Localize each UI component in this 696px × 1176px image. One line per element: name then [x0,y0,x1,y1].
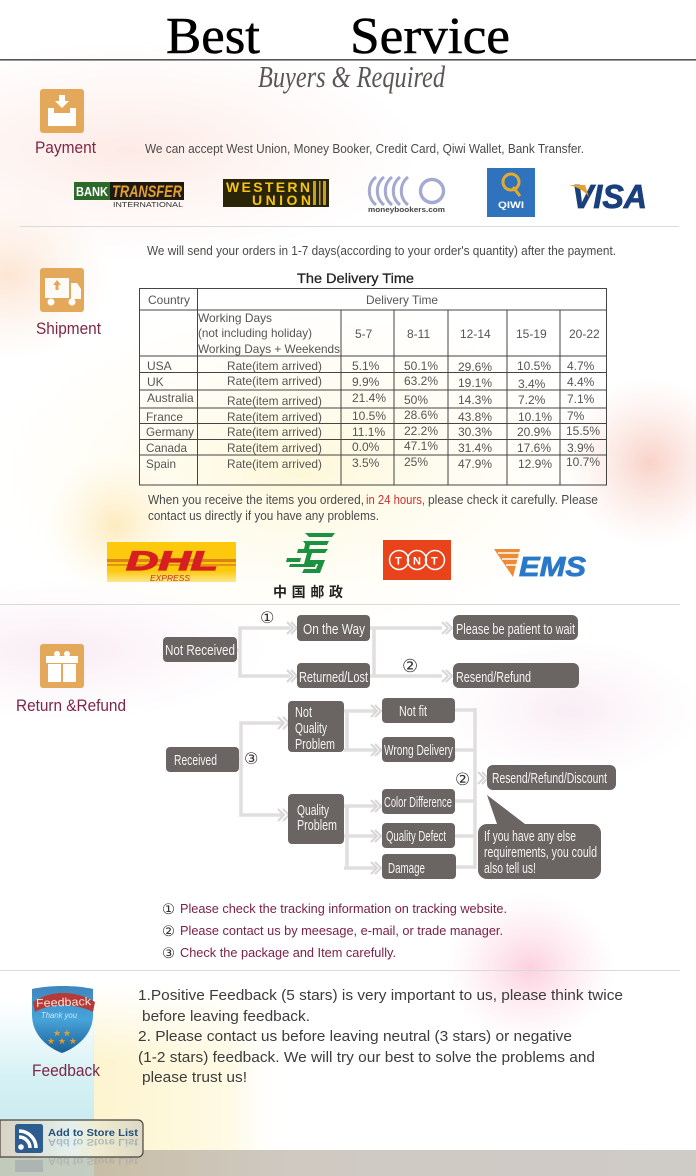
node: not quality problem: Not [295,704,313,721]
title [166,8,510,65]
node: damage [382,854,456,879]
logo: tnt [383,540,451,580]
receipt note: please check it carefully. Please [428,493,598,507]
table rows: 15.5% [566,424,600,438]
node: not quality problem [288,701,344,753]
logo: western union: UNION [252,192,311,208]
heading: payment: Payment [35,138,96,157]
table rows: 0.0% [352,440,380,454]
table rows: Rate(item arrived) [227,374,322,388]
node: quality problem [288,794,344,844]
marker 2: ② [402,656,418,677]
logo: bank transfer: INTERNATIONAL [113,202,183,209]
icon: rss [15,1124,43,1153]
heading: shipment: Shipment [36,319,101,338]
flowchart: not received [163,608,579,688]
table header text: 12-14 [460,327,491,341]
table header text: 8-11 [407,327,430,341]
feedback text [138,987,623,1086]
table rows: 10.5% [352,409,386,423]
table rows: 7.1% [567,392,595,406]
icon: payment [40,89,84,133]
table header text: Delivery Time [366,293,438,307]
table rows: 4.7% [567,359,595,373]
table grid [140,288,606,485]
node: not quality problem: Quality [295,720,327,737]
table rows: 3.5% [352,456,380,470]
table rows: Rate(item arrived) [227,425,322,439]
table rows: 14.3% [458,393,492,407]
legend notes: Please check the tracking information on tracking website. [180,901,507,916]
table rows: 10.1% [518,410,552,424]
divider [20,226,679,227]
callout: requirements, you could [484,844,597,861]
table rows: Rate(item arrived) [227,441,322,455]
legend notes [162,901,507,962]
icon: feedback shield: Feedback [36,996,91,1010]
node: resend/refund: Resend/Refund [456,669,531,686]
receipt note: When you receive the items you ordered, [148,493,364,507]
node: received: Received [174,752,217,769]
table rows: Australia [147,391,194,405]
table header text: 15-19 [516,327,547,341]
logo: ems: EMS [519,551,586,582]
table header text: Working Days + Weekends [198,342,340,356]
table header text: (not including holiday) [198,326,312,340]
table rows: 17.6% [517,441,551,455]
legend notes: ③ [162,946,175,962]
table rows: 19.1% [458,376,492,390]
table rows [146,359,600,471]
table rows: 3.9% [567,441,595,455]
node: not received [163,637,237,662]
table rows: 5.1% [352,359,380,373]
connectors [239,705,488,874]
logo: qiwi: QIWI [498,200,524,211]
table rows: USA [147,359,172,373]
panel: return and refund [16,608,616,962]
icon: feedback shield: ★★ [53,1029,71,1039]
logo: china post: 中国邮政 [273,582,343,602]
table rows: 21.4% [352,391,386,405]
legend notes: ② [162,924,175,940]
node: returned/lost: Returned/Lost [299,669,369,686]
node: resend/refund [453,663,579,688]
table rows: Germany [146,425,194,439]
bottom grey bar [0,1150,696,1176]
node: please be patient: Please be patient to wait [456,621,576,638]
node: wrong delivery [382,737,455,762]
node: not quality problem: Problem [295,736,335,753]
logo: tnt: T [431,556,438,568]
logo: china post [273,533,343,602]
title: Best [166,8,261,65]
shipment intro text: We will send your orders in 1-7 days(according to your order's quantity) after the payment. [147,244,616,258]
table rows: 50% [404,393,428,407]
node: resend/refund/discount [487,765,616,790]
heading: return and refund: Return &Refund [16,696,126,715]
node: resend/refund/discount: Resend/Refund/Discount [492,770,608,787]
legend notes: Check the package and Item carefully. [180,945,396,960]
table rows: 3.4% [518,377,546,391]
logo: dhl: DHL [126,546,218,576]
logo: qiwi [487,168,535,217]
logo: ems [494,549,586,582]
table rows: 9.9% [352,375,380,389]
logo: bank transfer: TRANSFER [112,182,183,201]
table rows: 7% [567,409,585,423]
table rows: 7.2% [518,393,546,407]
feedback text: (1-2 stars) feedback. We will try our best to solve the problems and [138,1049,595,1066]
feedback text: 1.Positive Feedback (5 stars) is very important to us, please think twice [138,987,623,1004]
subtitle: Buyers & Required [258,59,445,94]
node: not fit: Not fit [399,703,428,720]
button: add to store list: Add to Store List [48,1155,139,1167]
logo: bank transfer [74,182,184,209]
node: quality problem: Quality [297,802,329,819]
flowchart: received [166,698,616,879]
table rows: 10.5% [517,359,551,373]
node: returned/lost [297,663,370,688]
logo: western union [223,179,329,208]
node: color difference: Color Difference [384,794,452,811]
feedback text: please trust us! [142,1069,247,1086]
marker 2: ② [455,770,470,790]
node: quality defect: Quality Defect [386,828,447,845]
legend notes: Please contact us by meesage, e-mail, or trade manager. [180,923,503,938]
node: quality problem: Problem [297,817,337,834]
icon: gift [40,644,84,688]
table rows: 4.4% [567,375,595,389]
node: not received: Not Received [165,642,235,659]
table header text [148,293,600,356]
icon: feedback shield [32,986,95,1053]
table title: The Delivery Time [297,271,414,286]
node: damage: Damage [388,860,425,877]
table rows: Spain [146,457,176,471]
logo: dhl: EXPRESS [150,574,191,583]
button: add to store list: Add to Store List [48,1136,139,1148]
table rows: 11.1% [352,425,385,439]
panel: feedback [32,986,623,1086]
node: not fit [382,698,455,723]
node: please be patient [453,615,578,640]
node: quality defect [382,823,455,848]
logo: tnt: N [413,556,421,568]
icon: feedback shield: Thank you [41,1011,78,1020]
table rows: 30.3% [458,425,492,439]
callout: If you have any else [484,828,576,845]
table rows: 12.9% [518,457,552,471]
payment text: We can accept West Union, Money Booker, Credit Card, Qiwi Wallet, Bank Transfer. [145,142,584,156]
button: add to store list: Add to Store List [48,1127,139,1139]
table rows: France [146,410,183,424]
table rows: 43.8% [458,410,492,424]
table rows: 28.6% [404,408,438,422]
table rows: Canada [146,441,187,455]
table rows: 29.6% [458,360,492,374]
node: on the way [297,615,370,641]
table header text: Working Days [198,311,272,325]
divider [0,604,680,605]
logo: moneybookers: moneybookers.com [368,205,445,214]
node: color difference [382,789,455,814]
heading: feedback: Feedback [32,1061,100,1080]
feedback text: before leaving feedback. [142,1008,310,1025]
delivery table [140,288,606,485]
logo: visa: VISA [572,178,647,215]
table header text: 5-7 [355,327,373,341]
legend notes: ① [162,902,175,918]
button: add to store list [0,1120,143,1172]
table rows: Rate(item arrived) [227,359,322,373]
logo: western union: WESTERN [226,179,310,195]
panel: payment [35,89,647,217]
logo: dhl [107,542,236,583]
connectors [237,622,452,682]
panel: shipment [36,244,616,602]
table header text: Country [148,293,190,307]
node: wrong delivery: Wrong Delivery [384,742,453,759]
table header text: 20-22 [569,327,600,341]
marker 1: ① [260,608,274,627]
receipt note [148,493,598,523]
callout [478,795,601,879]
node: received [166,747,239,772]
table rows: Rate(item arrived) [227,394,322,408]
node: on the way: On the Way [303,621,365,638]
logo: tnt: T [395,556,402,568]
table rows: 10.7% [566,455,600,469]
title rule [0,59,696,61]
table rows: Rate(item arrived) [227,410,322,424]
table rows: Rate(item arrived) [227,457,322,471]
icon: truck [40,268,84,312]
receipt note: contact us directly if you have any problems. [148,509,379,523]
title: Service [350,8,510,65]
receipt note: in 24 hours, [366,493,425,507]
table rows: 47.9% [458,457,492,471]
feedback text: 2. Please contact us before leaving neutral (3 stars) or negative [138,1028,572,1045]
table rows: 63.2% [404,374,438,388]
table rows: UK [147,375,164,389]
table rows: 47.1% [404,439,438,453]
table rows: 20.9% [517,425,551,439]
table rows: 50.1% [404,359,438,373]
callout: also tell us! [484,860,536,877]
table rows: 25% [404,455,428,469]
icon: feedback shield: ★★★ [47,1037,77,1047]
divider [0,970,680,971]
logo: moneybookers [368,177,445,214]
table rows: 22.2% [404,424,438,438]
logo: bank transfer: BANK [76,184,109,199]
marker 3: ③ [244,749,258,768]
table rows: 31.4% [458,441,492,455]
